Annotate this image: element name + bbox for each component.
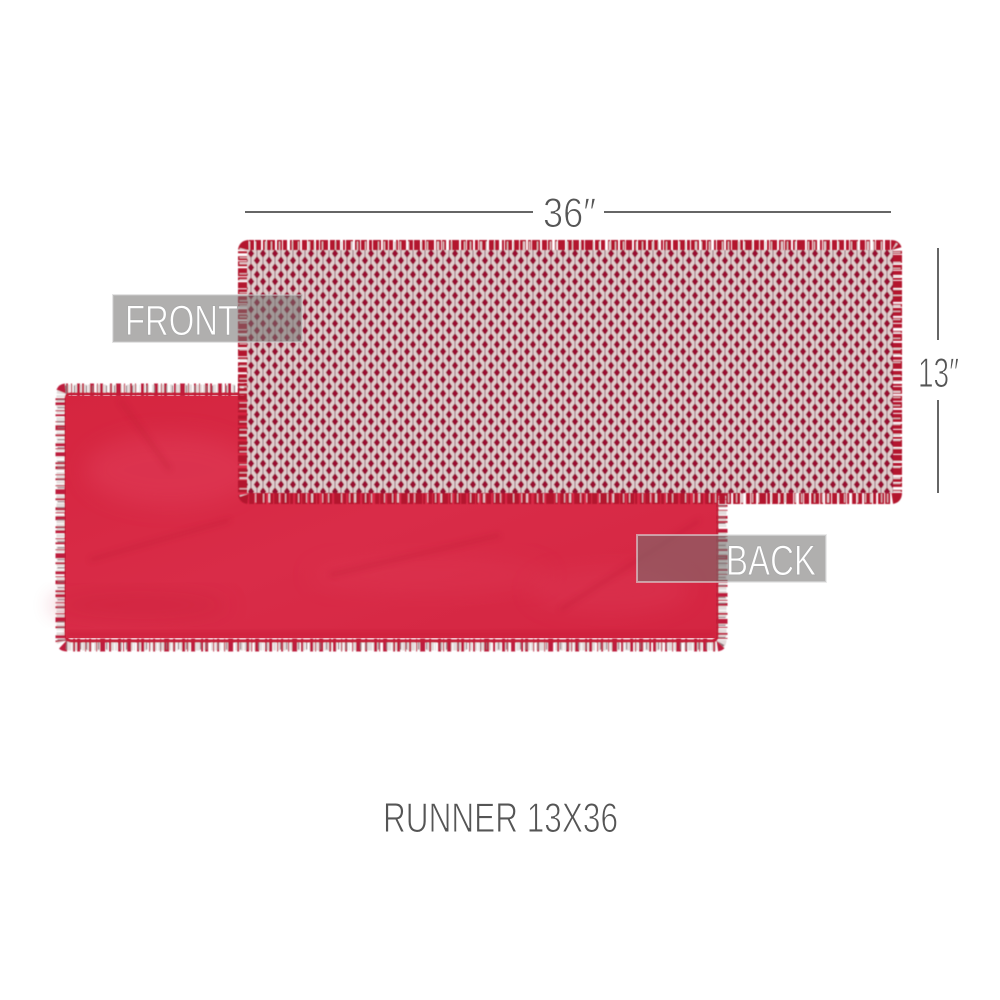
panel: front of runner [244, 246, 896, 498]
front woven face [247, 250, 893, 493]
label: front: FRONT [125, 297, 238, 345]
back satin face [66, 396, 716, 638]
label: back [637, 535, 826, 585]
dimension: height 13 inches: 13″ [918, 349, 959, 396]
caption: RUNNER 13X36 [383, 794, 618, 841]
back fringe [62, 390, 721, 645]
dimension: width 36 inches: 36″ [543, 189, 596, 236]
label: back: BACK [726, 537, 816, 585]
front fringe [244, 246, 896, 498]
panel: back of runner [50, 390, 721, 645]
satin folds [50, 400, 716, 638]
